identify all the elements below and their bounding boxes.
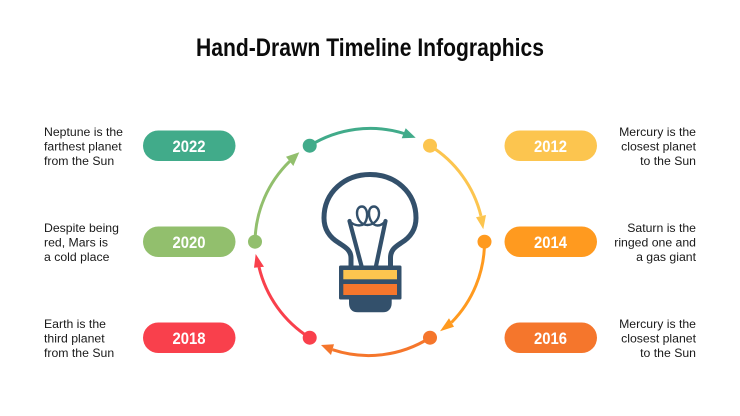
timeline entry: 2020: a cold place (44, 250, 110, 264)
timeline entry: 2012: closest planet (621, 140, 697, 154)
arrow: 2018 red (254, 254, 317, 345)
arrow: 2016 dark orange (321, 331, 437, 356)
timeline entry: 2020 (44, 221, 236, 264)
timeline entry: 2020: Despite being (44, 221, 119, 235)
timeline entry: 2022: Neptune is the (44, 125, 123, 139)
timeline entry: 2014 (504, 221, 697, 264)
title: Hand-Drawn Timeline Infographics (196, 34, 544, 62)
timeline entry: 2012: Mercury is the (619, 125, 696, 139)
timeline entry: 2014: 2014 (534, 233, 567, 252)
timeline entry: 2012: 2012 (534, 137, 567, 156)
timeline entry: 2018: 2018 (172, 329, 206, 348)
timeline entry: 2022: farthest planet (44, 140, 122, 154)
icon: light bulb (324, 174, 416, 312)
timeline entry: 2020: red, Mars is (44, 236, 108, 250)
timeline entry: 2022: 2022 (172, 137, 206, 156)
timeline entry: 2012 (504, 125, 697, 168)
timeline entry: 2014: a gas giant (636, 250, 697, 264)
timeline entry: 2016: closest planet (621, 332, 697, 346)
timeline entry: 2016: Mercury is the (619, 317, 696, 331)
timeline entry: 2022 (44, 125, 236, 168)
timeline entry: 2018: from the Sun (44, 346, 114, 360)
timeline entry: 2018: Earth is the (44, 317, 106, 331)
arrow: 2022 teal (303, 128, 416, 153)
timeline entry: 2014: Saturn is the (627, 221, 696, 235)
timeline entry: 2018: third planet (44, 332, 105, 346)
arrow: 2014 orange (440, 235, 492, 331)
timeline entry: 2022: from the Sun (44, 154, 114, 168)
timeline entry: 2014: ringed one and (614, 236, 696, 250)
timeline entry: 2020: 2020 (172, 233, 206, 252)
arrow: 2020 green (248, 152, 299, 249)
arrow: 2012 yellow (423, 139, 486, 229)
timeline entry: 2016: to the Sun (640, 346, 696, 360)
timeline entry: 2016 (504, 317, 697, 360)
timeline entry: 2018 (44, 317, 236, 360)
timeline entry: 2016: 2016 (534, 329, 567, 348)
timeline entry: 2012: to the Sun (640, 154, 696, 168)
